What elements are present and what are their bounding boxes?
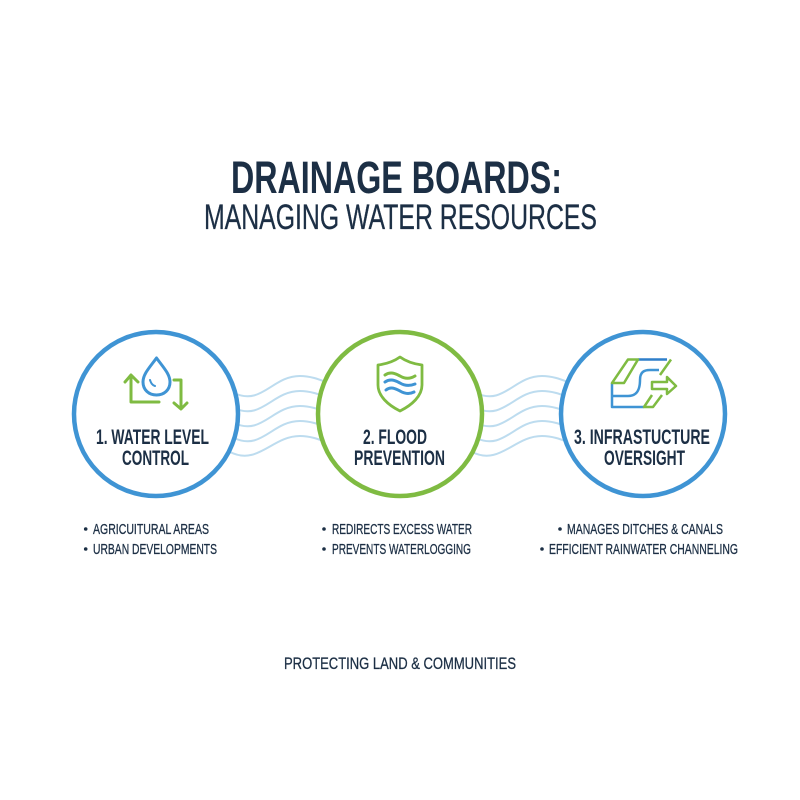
heading: infrastructure oversight (574, 426, 710, 470)
text block: flood prevention bullets: REDIRECTS EXCESS WATER (332, 521, 472, 538)
heading: infrastructure oversight: 3. INFRASTUCTURE (574, 426, 710, 449)
heading: water level control (96, 426, 209, 470)
waves: left connector (230, 376, 326, 456)
text block: flood prevention bullets (322, 521, 472, 558)
heading: flood prevention: PREVENTION (354, 447, 445, 470)
heading: water level control: 1. WATER LEVEL (96, 426, 209, 449)
text block: water level bullets: AGRICUITURAL AREAS (93, 521, 209, 538)
panel: infrastructure oversight (561, 332, 725, 496)
icon: water drop with level arrows (125, 358, 187, 409)
text block: infrastructure bullets (540, 521, 738, 558)
title (204, 152, 597, 237)
text block: water level bullets (84, 521, 217, 558)
icon: shield with waves (378, 357, 422, 411)
panel: water level control (74, 332, 238, 496)
title: MANAGING WATER RESOURCES (204, 198, 597, 237)
title: DRAINAGE BOARDS: (231, 152, 562, 203)
heading: flood prevention: 2. FLOOD (363, 426, 427, 449)
waves: right connector (472, 376, 568, 456)
text block: infrastructure bullets: MANAGES DITCHES & CANALS (567, 521, 723, 538)
footer tagline: PROTECTING LAND & COMMUNITIES (284, 654, 516, 673)
heading: flood prevention (354, 426, 445, 470)
text block: flood prevention bullets: PREVENTS WATERLOGGING (332, 541, 471, 558)
heading: infrastructure oversight: OVERSIGHT (604, 447, 685, 470)
heading: water level control: CONTROL (122, 447, 189, 470)
icon: channel with arrow (612, 360, 676, 407)
text block: water level bullets: URBAN DEVELOPMENTS (93, 541, 217, 558)
panel: flood prevention (318, 332, 482, 496)
